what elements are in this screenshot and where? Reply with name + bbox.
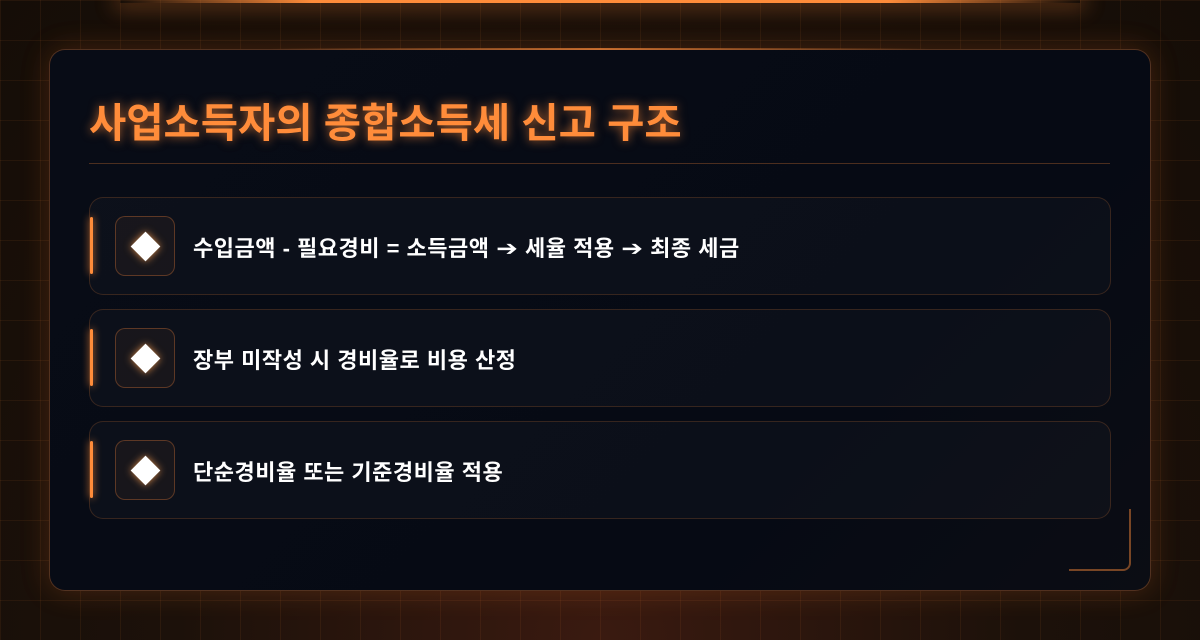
icon: diamond xyxy=(115,216,175,276)
corner bracket xyxy=(1069,509,1131,571)
text: formula: ➔ xyxy=(621,237,644,261)
row 2 xyxy=(89,309,1111,407)
text: rates: 단순경비율 또는 기준경비율 적용 xyxy=(193,460,503,485)
icon: diamond xyxy=(115,440,175,500)
row 3 xyxy=(89,421,1111,519)
panel: main card xyxy=(49,49,1151,591)
text: formula: ➔ xyxy=(496,237,518,261)
text: expense rate: 장부 미작성 시 경비율로 비용 산정 xyxy=(193,348,516,373)
title: 사업소득자의 종합소득세 신고 구조 xyxy=(89,100,682,146)
text: formula: 수입금액 - 필요경비 = 소득금액 세율 적용 최종 세금 xyxy=(193,236,740,261)
row 1 xyxy=(89,197,1111,295)
icon: diamond xyxy=(115,328,175,388)
